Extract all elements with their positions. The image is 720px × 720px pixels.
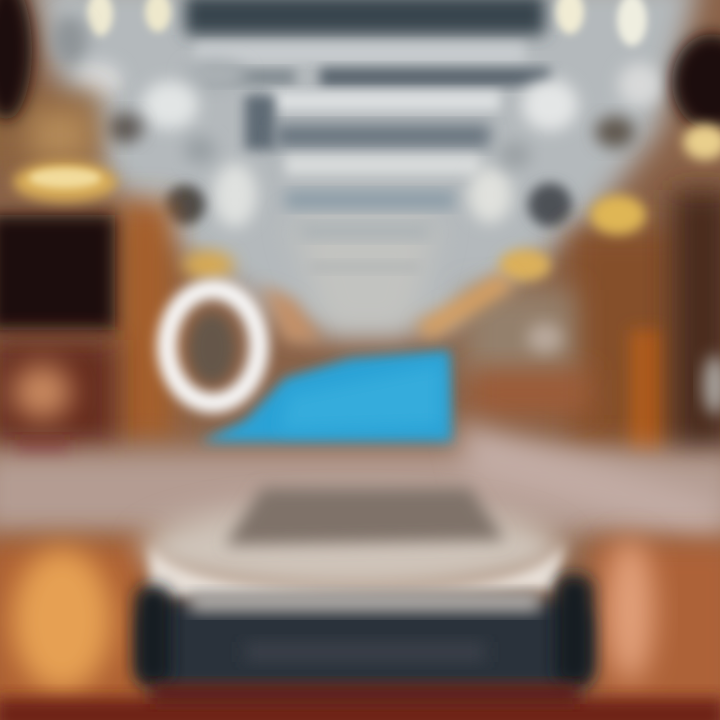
icon: left hanging lamp: [13, 162, 117, 202]
right wall: [465, 34, 720, 460]
ceiling: [30, 0, 700, 335]
blue panel: [200, 350, 452, 442]
central seating: [135, 488, 593, 704]
left wall: [0, 0, 173, 460]
icon: right lamps: [182, 124, 720, 342]
floor: [0, 420, 720, 720]
icon: white ring: [167, 289, 259, 403]
